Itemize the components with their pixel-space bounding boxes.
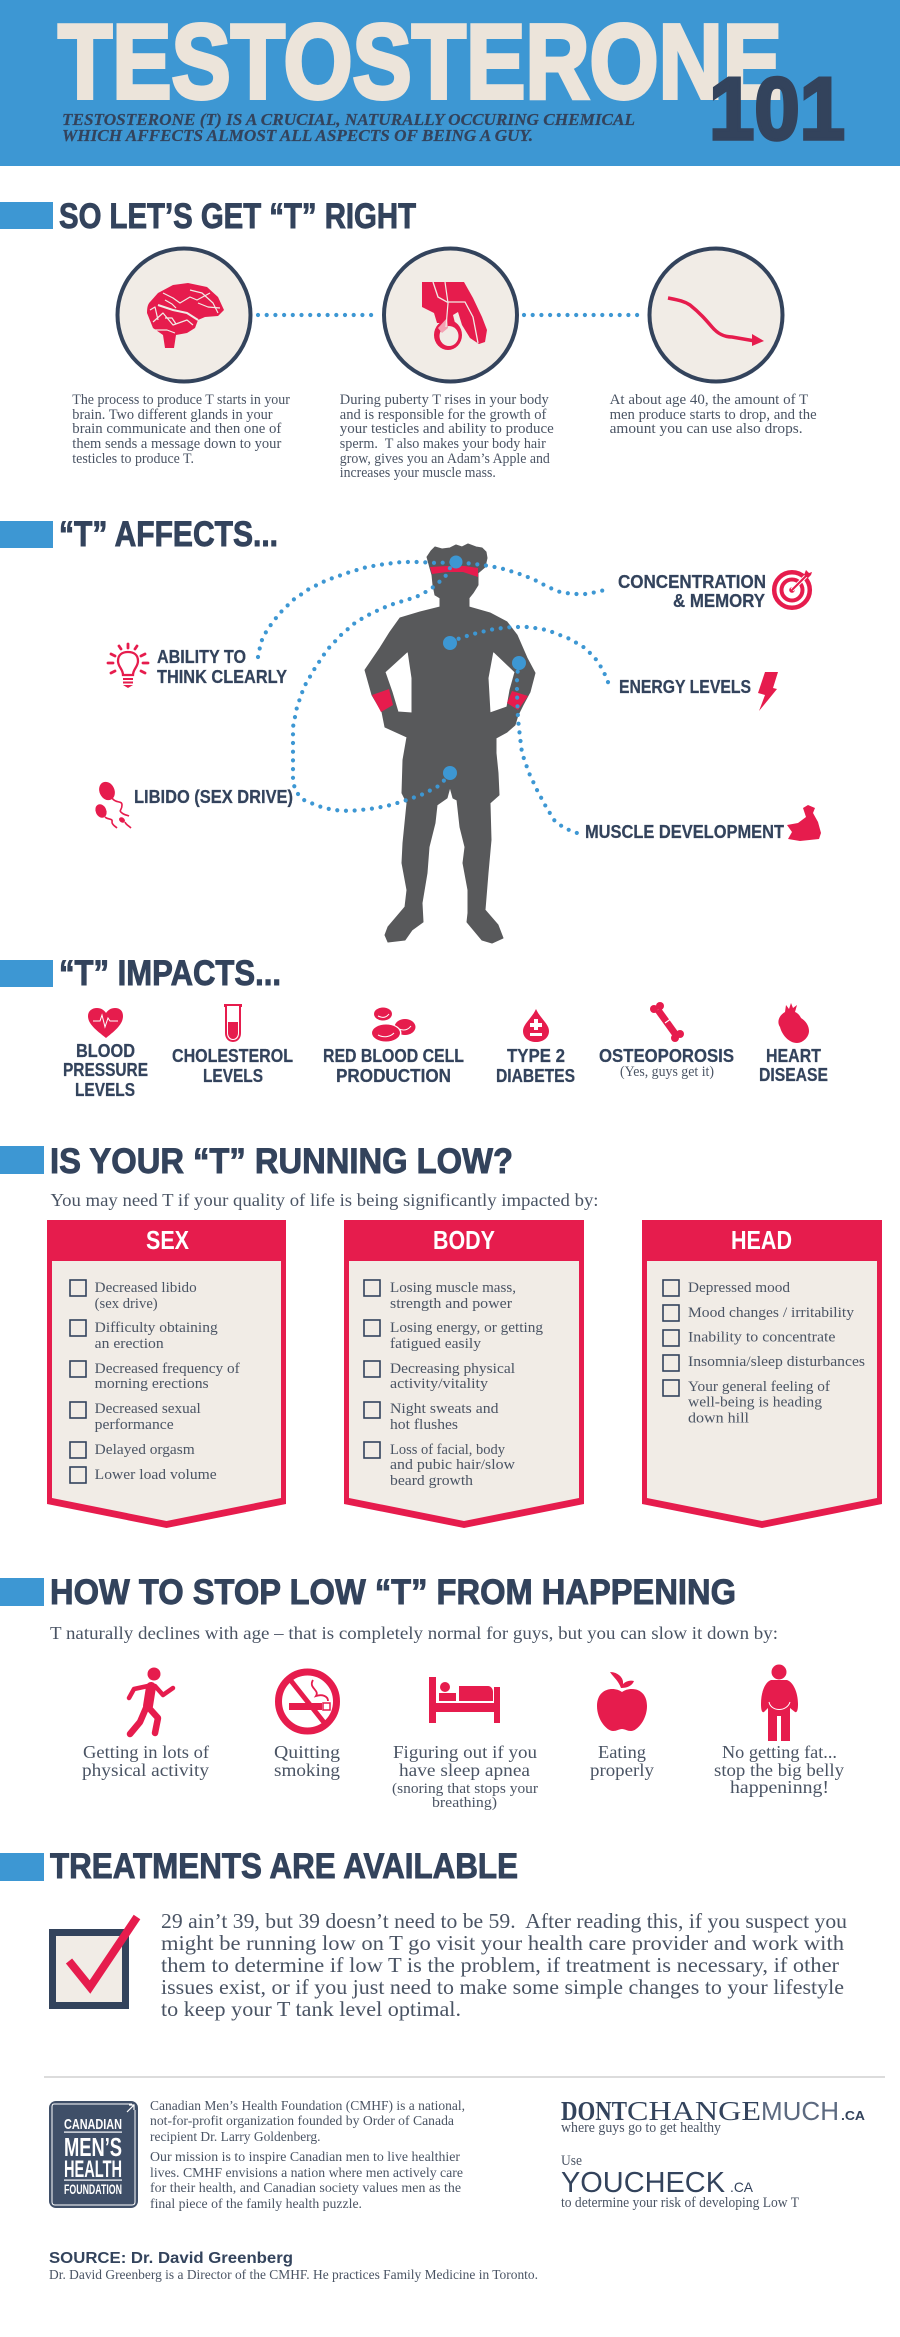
text block: 29 ain’t 39, but 39 doesn’t need to be 59. After reading this, if you suspect you [161, 1909, 848, 1933]
logo: dontchangemuch.ca [561, 2096, 866, 2126]
intro text: T naturally declines with age – that is completely normal for guys, but you can slow it down by: [50, 1623, 778, 1643]
impact: blood pressure: BLOOD [76, 1041, 135, 1061]
text: step 3 [610, 392, 817, 437]
tip: sleep apnea: (snoring that stops your [392, 1781, 538, 1797]
logo: dontchangemuch.ca: .CA [841, 2108, 866, 2123]
heading: SO LET’S GET “T” RIGHT [59, 197, 416, 236]
text: about CMHF [150, 2099, 465, 2212]
text: step 2 [340, 392, 554, 481]
logo: Canadian Men's Health Foundation: HEALTH [64, 2156, 122, 2183]
text: about CMHF: recipient Dr. Larry Goldenberg. [150, 2130, 320, 2145]
impact: type 2 diabetes [496, 1009, 575, 1086]
heading bar [0, 1578, 44, 1606]
text: step 3: men produce starts to drop, and the [610, 407, 817, 423]
source: Dr. David Greenberg is a Director of the CMHF. He practices Family Medicine in Toronto. [49, 2268, 538, 2283]
impact: red blood cells [323, 1008, 464, 1086]
label: ability to think clearly [157, 647, 287, 687]
text block: issues exist, or if you just need to make some simple changes to your lifestyle [161, 1975, 844, 1999]
checklist text: Lower load volume [95, 1467, 217, 1483]
icon: checked box [52, 1917, 137, 2006]
impact: osteoporosis: OSTEOPOROSIS [599, 1046, 734, 1066]
checklist text: Decreased frequency of [95, 1361, 240, 1377]
tip: sleep apnea: have sleep apnea [399, 1760, 530, 1780]
checklist text: Losing energy, or getting [390, 1320, 543, 1336]
checklist text: Night sweats and [390, 1401, 499, 1417]
checklist text: Inability to concentrate [688, 1330, 836, 1346]
header banner [0, 0, 900, 166]
logo: Canadian Men's Health Foundation: FOUNDATION [64, 2181, 122, 2197]
source: SOURCE: Dr. David Greenberg [49, 2250, 293, 2267]
impact: blood pressure: PRESSURE [63, 1060, 148, 1080]
checklist text: (sex drive) [95, 1296, 158, 1312]
tagline: where guys go to get healthy [561, 2120, 722, 2136]
icon: declining arrow [650, 248, 782, 382]
label: concentration & memory [618, 572, 766, 611]
text: step 1: brain communicate and then one of [72, 421, 281, 437]
checklist text: morning erections [95, 1376, 209, 1392]
impact: red blood cells: RED BLOOD CELL [323, 1046, 464, 1066]
impact: blood pressure: LEVELS [75, 1080, 135, 1100]
section: T impacts [0, 954, 828, 1100]
impact: osteoporosis [599, 1002, 734, 1080]
tip: no belly fat: stop the big belly [714, 1760, 844, 1780]
logo: dontchangemuch.ca: DONT [561, 2096, 627, 2126]
text: youcheck description: to determine your risk of developing Low T [561, 2195, 799, 2211]
icon: brain [118, 248, 250, 382]
dotted lines to labels [258, 562, 610, 833]
text: step 2: During puberty T rises in your body [340, 392, 550, 408]
impact: heart disease: HEART [766, 1046, 821, 1066]
tip: physical activity: physical activity [82, 1760, 209, 1780]
text: step 2: sperm. T also makes your body hair [340, 436, 546, 452]
panel: body checklist [344, 1220, 584, 1528]
checklist text: an erection [95, 1336, 164, 1352]
checklist text: activity/vitality [390, 1376, 489, 1392]
tip: sleep apnea [392, 1677, 538, 1811]
tip: no belly fat [714, 1664, 844, 1797]
icon: light bulb [108, 644, 148, 688]
tip: quitting smoking: smoking [274, 1760, 340, 1780]
icon: blood cells [370, 1008, 416, 1042]
source [49, 2250, 538, 2283]
impact: red blood cells: PRODUCTION [336, 1066, 451, 1086]
text: step 1 [72, 392, 290, 467]
label: concentration & memory: CONCENTRATION [618, 572, 766, 592]
checklist text: strength and power [390, 1296, 512, 1312]
icon: no smoking [278, 1672, 336, 1731]
panel: sex checklist [47, 1220, 286, 1528]
tip: sleep apnea: Figuring out if you [393, 1742, 537, 1762]
section: treatments [0, 1847, 848, 2021]
subtitle: TESTOSTERONE (T) IS A CRUCIAL, NATURALLY OCCURING CHEMICAL [62, 110, 635, 129]
checklist text: hot flushes [390, 1417, 458, 1433]
section: so let's get T right [0, 197, 817, 481]
icon: runner [129, 1668, 173, 1734]
section: T affects [0, 515, 821, 943]
logo: dontchangemuch.ca: MUCH [761, 2096, 839, 2126]
tip: physical activity [82, 1668, 209, 1780]
subtitle [62, 110, 635, 145]
icon: apple [597, 1672, 647, 1731]
tip: physical activity: Getting in lots of [83, 1742, 209, 1762]
text: about CMHF: not-for-profit organization founded by Order of Canada [150, 2114, 455, 2129]
checklist text [95, 1280, 240, 1483]
text: step 2: grow, gives you an Adam’s Apple and [340, 451, 551, 467]
icon: flexed arm [787, 805, 821, 841]
icon: bone [650, 1002, 684, 1042]
checklist text: Depressed mood [688, 1280, 791, 1296]
text block: them to determine if low T is the problem, if treatment is necessary, if other [161, 1953, 839, 1977]
text: step 3: amount you can use also drops. [610, 421, 803, 437]
checklist text: Difficulty obtaining [95, 1320, 218, 1336]
label: energy levels: ENERGY LEVELS [619, 677, 751, 697]
heading bar [0, 1853, 44, 1881]
text: about CMHF: lives. CMHF envisions a nation where men actively care [150, 2166, 463, 2181]
tip: sleep apnea: breathing) [432, 1795, 497, 1811]
checklist text: Decreasing physical [390, 1361, 515, 1377]
tip: eating properly: properly [590, 1760, 654, 1780]
text: step 2: your testicles and ability to produce [340, 421, 554, 437]
icon: anatomical heart [778, 1003, 809, 1043]
heading bar [0, 960, 53, 987]
icon: target [774, 570, 812, 608]
title: TESTOSTERONE [58, 3, 782, 121]
text block [161, 1909, 848, 2021]
tip: no belly fat: No getting fat... [722, 1742, 837, 1762]
checklist text: Delayed orgasm [95, 1442, 195, 1458]
icon: heart with pulse [88, 1008, 123, 1038]
text: step 1: testicles to produce T. [72, 451, 194, 467]
logo: dontchangemuch.ca: CHANGE [627, 2096, 761, 2126]
panel: body checklist: BODY [433, 1225, 495, 1255]
headband [430, 566, 478, 577]
checkboxes [663, 1280, 679, 1396]
checklist text: Mood changes / irritability [688, 1305, 855, 1321]
checklist text: performance [95, 1417, 174, 1433]
tip: eating properly [590, 1672, 654, 1780]
checklist text: Decreased libido [95, 1280, 197, 1296]
logo: Canadian Men's Health Foundation: CANADIAN [64, 2116, 122, 2133]
icon: lightning bolt [758, 672, 778, 711]
panel: head checklist: HEAD [731, 1225, 792, 1255]
footer [44, 2076, 885, 2283]
section: how to stop low T [0, 1573, 844, 1811]
heading bar [0, 1146, 44, 1174]
tip: no belly fat: happeninng! [730, 1777, 829, 1797]
impact: cholesterol [172, 1004, 293, 1086]
text: about CMHF: Canadian Men’s Health Foundation (CMHF) is a national, [150, 2099, 465, 2114]
icon: blood drop [523, 1009, 549, 1042]
checklist text: Losing muscle mass, [390, 1280, 516, 1296]
impact: blood pressure [63, 1008, 148, 1100]
wristbands [372, 689, 528, 712]
text: step 1: them sends a message down to your [72, 436, 281, 452]
text: about CMHF: Our mission is to inspire Canadian men to live healthier [150, 2150, 460, 2165]
impact: heart disease [759, 1003, 828, 1085]
heading: “T” IMPACTS... [59, 954, 281, 993]
logo: youcheck.ca: .CA [730, 2179, 754, 2195]
label: concentration & memory: & MEMORY [673, 591, 765, 611]
impact: type 2 diabetes: DIABETES [496, 1066, 575, 1086]
heading: TREATMENTS ARE AVAILABLE [50, 1847, 518, 1886]
checklist text: Your general feeling of [688, 1379, 830, 1395]
checkboxes [70, 1280, 86, 1483]
text: step 1: The process to produce T starts in your [72, 392, 290, 408]
logo: Canadian Men's Health Foundation [49, 2101, 138, 2208]
tip: quitting smoking: Quitting [274, 1742, 340, 1762]
impact: cholesterol: LEVELS [203, 1066, 263, 1086]
checklist text: fatigued easily [390, 1336, 482, 1352]
tip: eating properly: Eating [598, 1742, 646, 1762]
text: step 2: increases your muscle mass. [340, 465, 496, 481]
checklist text: Decreased sexual [95, 1401, 201, 1417]
impact: type 2 diabetes: TYPE 2 [507, 1046, 565, 1066]
text: step 2: and is responsible for the growth of [340, 407, 547, 423]
checklist text [390, 1280, 543, 1489]
icon: sperm [93, 779, 131, 828]
icon: testicle anatomy [384, 248, 517, 382]
heading: HOW TO STOP LOW “T” FROM HAPPENING [50, 1573, 736, 1612]
checklist text: and pubic hair/slow [390, 1457, 516, 1473]
body markers [443, 556, 526, 780]
text block: might be running low on T go visit your health care provider and work with [161, 1931, 845, 1955]
heading bar [0, 202, 53, 229]
text: step 3: At about age 40, the amount of T [610, 392, 808, 408]
icon: bed [429, 1677, 500, 1723]
logo: Canadian Men's Health Foundation: MEN’S [64, 2132, 122, 2162]
text: about CMHF: final piece of the family health puzzle. [150, 2197, 362, 2212]
text: about CMHF: for their health, and Canadian society values men as the [150, 2181, 461, 2196]
dotted connectors [258, 313, 644, 317]
checklist text [688, 1280, 865, 1426]
label: ability to think clearly: ABILITY TO [157, 647, 246, 667]
checklist text: well-being is heading [688, 1394, 822, 1410]
heading: IS YOUR “T” RUNNING LOW? [50, 1142, 513, 1181]
impact: cholesterol: CHOLESTEROL [172, 1046, 293, 1066]
panel: head checklist [642, 1220, 882, 1528]
title number 101: 101 [709, 59, 845, 158]
icon: test tube [224, 1004, 242, 1041]
panel: sex checklist: SEX [146, 1225, 190, 1255]
checklist text: down hill [688, 1410, 749, 1426]
heading: “T” AFFECTS... [59, 515, 278, 554]
intro text: You may need T if your quality of life is being significantly impacted by: [50, 1190, 598, 1210]
impact: heart disease: DISEASE [759, 1065, 828, 1085]
text: step 1: brain. Two different glands in your [72, 407, 273, 423]
heading bar [0, 521, 53, 548]
checklist text: Insomnia/sleep disturbances [688, 1354, 865, 1370]
label: ability to think clearly: THINK CLEARLY [157, 667, 287, 687]
text: use: Use [561, 2153, 582, 2169]
subtitle: WHICH AFFECTS ALMOST ALL ASPECTS OF BEING A GUY. [62, 126, 533, 145]
logo: youcheck.ca: YOUCHECK [561, 2167, 726, 2199]
tip: quitting smoking [274, 1672, 340, 1780]
impact: osteoporosis: (Yes, guys get it) [620, 1064, 714, 1080]
human figure silhouette [365, 544, 535, 943]
label: muscle development: MUSCLE DEVELOPMENT [585, 822, 784, 842]
checklist text: Loss of facial, body [390, 1442, 506, 1458]
icon: overweight man [761, 1664, 798, 1741]
text block: to keep your T tank level optimal. [161, 1997, 461, 2021]
label: libido: LIBIDO (SEX DRIVE) [134, 787, 293, 807]
section: is your T running low [0, 1142, 882, 1528]
checklist text: beard growth [390, 1473, 474, 1489]
checkboxes [364, 1280, 380, 1458]
